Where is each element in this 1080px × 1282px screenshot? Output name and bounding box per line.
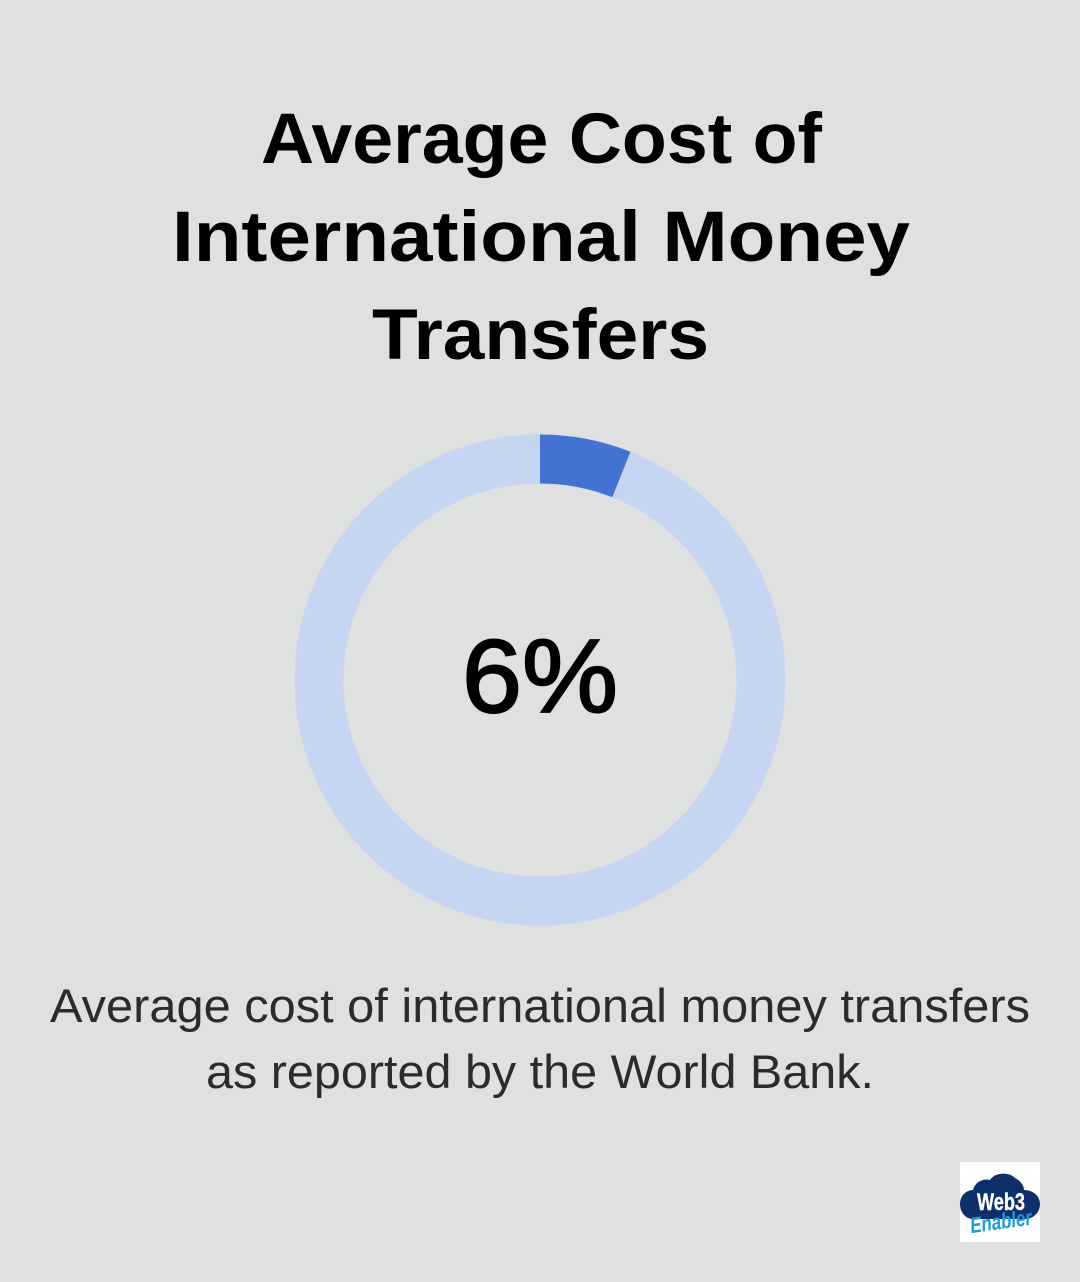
title: International Money — [172, 198, 911, 277]
title — [172, 100, 911, 375]
icon: cloud — [960, 1174, 1040, 1219]
title: Transfers — [372, 296, 709, 375]
logo script: Enabler — [968, 1205, 1034, 1238]
logo wordmark: Web3 — [977, 1189, 1025, 1216]
value: 6%: 6% — [462, 619, 618, 735]
caption: as reported by the World Bank. — [206, 1045, 874, 1098]
title: Average Cost of — [261, 100, 822, 179]
chart segment: 6% — [540, 434, 630, 497]
logo: Web3 Enabler — [960, 1162, 1040, 1242]
chart track — [319, 459, 761, 901]
caption: Average cost of international money transfers — [50, 979, 1030, 1032]
caption — [50, 979, 1030, 1098]
donut chart — [319, 434, 761, 901]
